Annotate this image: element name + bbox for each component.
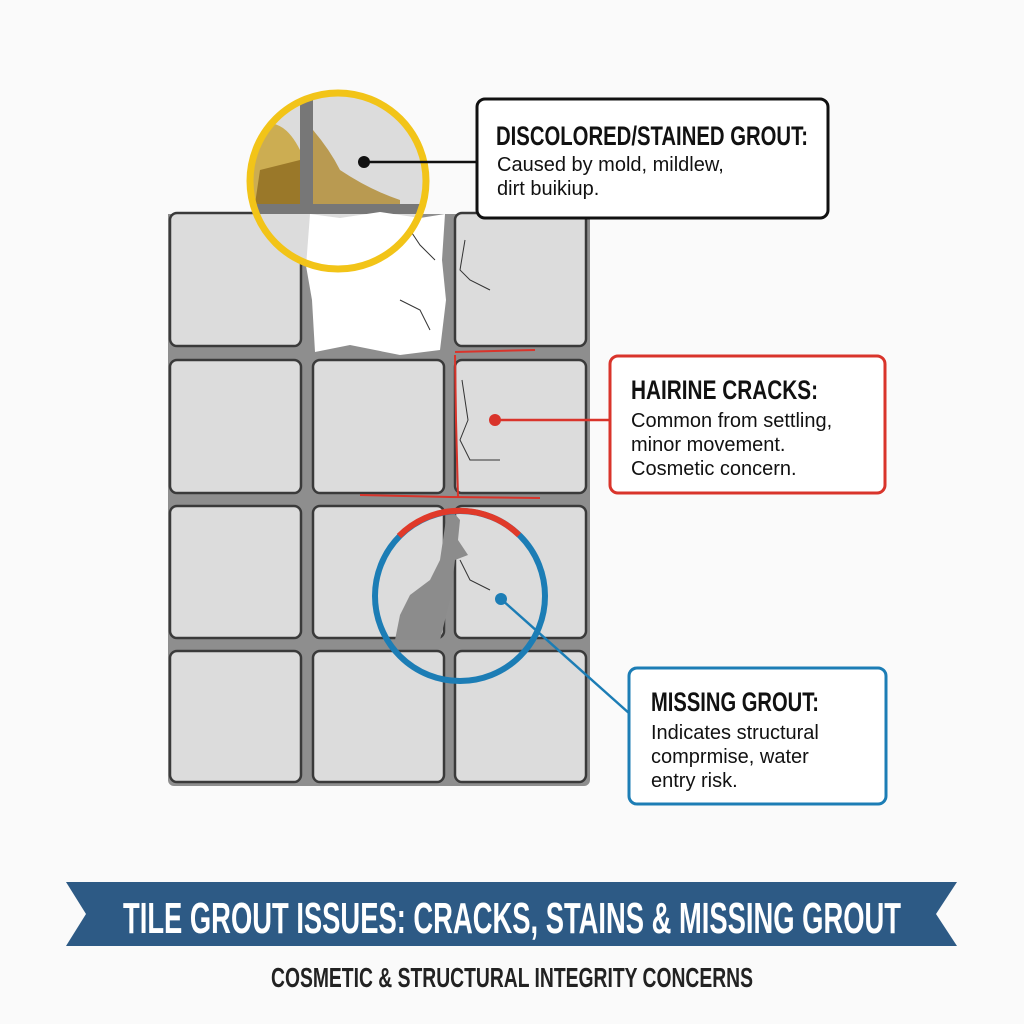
subtitle: COSMETIC & STRUCTURAL INTEGRITY CONCERNS [271, 962, 753, 993]
callout: hairline [610, 356, 885, 493]
callout: hairline: minor movement. [631, 434, 786, 456]
callout: missing: entry risk. [651, 770, 738, 792]
missing tile area [305, 212, 446, 355]
callout: discolored: dirt buikiup. [497, 178, 599, 200]
callout: missing: Indicates structural [651, 722, 819, 744]
callout: discolored: DISCOLORED/STAINED GROUT: [496, 121, 808, 151]
title banner [66, 882, 957, 946]
callout: hairline: Common from settling, [631, 410, 832, 432]
callout: missing: comprmise, water [651, 746, 809, 768]
callout: hairline: Cosmetic concern. [631, 458, 797, 480]
callout: hairline: HAIRINE CRACKS: [631, 375, 818, 405]
hairline red crack [360, 350, 540, 498]
missing grout chunk [395, 506, 468, 640]
yellow circle: stained grout [246, 90, 430, 272]
blue/red circle: missing grout [375, 511, 545, 681]
connector: stained [358, 156, 477, 168]
tile grid [168, 200, 590, 786]
callout: discolored [477, 99, 828, 218]
callout: missing: MISSING GROUT: [651, 687, 819, 717]
connector: missing [495, 593, 630, 714]
connector: hairline [489, 414, 610, 426]
callout: discolored: Caused by mold, mildlew, [497, 154, 724, 176]
callout: missing [629, 668, 886, 804]
